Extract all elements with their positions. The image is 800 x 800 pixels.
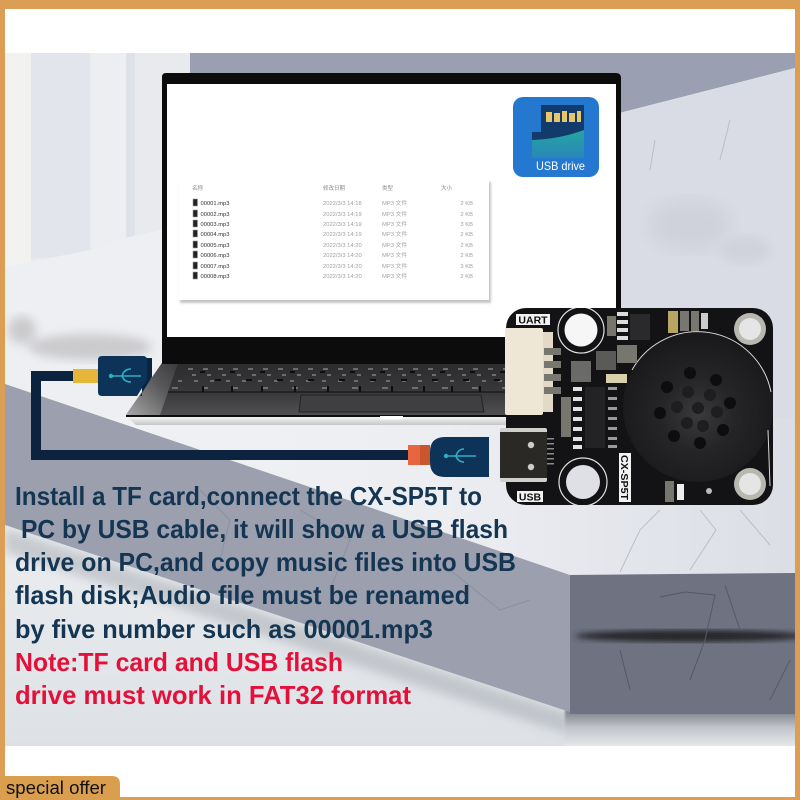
file list rows: 2022/3/3 14:19 [323, 222, 362, 228]
file list rows: 00005.mp3 [200, 243, 230, 249]
file list rows: 2022/3/3 14:20 [323, 243, 362, 249]
file list rows: 3 KB [460, 264, 473, 270]
label: UART: UART [518, 314, 548, 326]
small components [561, 311, 712, 502]
board body [506, 308, 773, 505]
file list rows: 2022/3/3 14:20 [323, 253, 362, 259]
file list rows: 2022/3/3 14:18 [323, 201, 362, 207]
label: CX-SP5T: CX-SP5T [618, 455, 630, 501]
USB-C socket [500, 428, 554, 482]
lower marble surface [5, 418, 795, 578]
file list rows: 2022/3/3 14:19 [323, 212, 362, 218]
special offer tag: special offer [6, 778, 106, 798]
special offer tag [0, 776, 120, 800]
file list rows: 00006.mp3 [200, 253, 230, 259]
instruction text: Install a TF card,connect the CX-SP5T to [15, 481, 482, 511]
file list rows: MP3 文件 [382, 199, 407, 207]
laptop base left highlight [126, 363, 178, 415]
file list rows: 2 KB [460, 232, 473, 238]
red note text: Note:TF card and USB flash [15, 647, 343, 677]
file list rows: 2 KB [460, 212, 473, 218]
instruction text: drive on PC,and copy music files into USB [15, 547, 516, 577]
file list window [179, 179, 491, 303]
file list rows: MP3 文件 [382, 210, 407, 218]
file list rows: MP3 文件 [382, 220, 407, 228]
white page band below the photo [5, 746, 795, 798]
shadow beneath block right face [565, 710, 800, 746]
file list rows: 00002.mp3 [200, 212, 230, 218]
file list rows: 2022/3/3 14:20 [323, 274, 362, 280]
touchpad [299, 395, 484, 412]
file list rows: 00004.mp3 [200, 232, 230, 238]
file list rows: MP3 文件 [382, 262, 407, 270]
USB cable [36, 356, 489, 477]
grey wall [190, 53, 795, 118]
file list header: 大小 [441, 184, 453, 192]
cable line [36, 376, 408, 455]
laptop front lip [126, 416, 512, 425]
red note text: drive must work in FAT32 format [15, 680, 411, 710]
file icons [193, 199, 198, 279]
keyboard [168, 369, 508, 392]
file list rows [200, 199, 473, 280]
laptop base [126, 363, 512, 415]
USB plug yellow [73, 356, 152, 396]
file list rows: 00003.mp3 [200, 222, 230, 228]
right marble wall [612, 68, 795, 580]
IC chip [573, 387, 617, 449]
file list rows: 3 KB [460, 222, 473, 228]
left marble surface [5, 229, 165, 430]
file list header: 类型 [382, 184, 394, 192]
mounting holes [558, 307, 766, 506]
file list rows: 2 KB [460, 201, 473, 207]
file list header: 修改日期 [323, 184, 346, 192]
CX-SP5T module board [500, 307, 773, 506]
instruction text: by five number such as 00001.mp3 [15, 614, 433, 644]
label: USB: USB [519, 492, 542, 504]
instruction text: flash disk;Audio file must be renamed [15, 580, 470, 610]
marble block: right face [570, 573, 800, 714]
curtain [5, 53, 195, 373]
file list rows: 2 KB [460, 243, 473, 249]
instruction text [15, 481, 516, 644]
instruction text: PC by USB cable, it will show a USB flash [21, 514, 508, 544]
red note text [15, 647, 411, 710]
marble block: left face [5, 384, 570, 712]
file list rows: 2022/3/3 14:20 [323, 264, 362, 270]
file list rows: 00008.mp3 [200, 274, 230, 280]
file list rows: MP3 文件 [382, 251, 407, 259]
USB plug orange [408, 437, 489, 477]
file list rows: 2 KB [460, 253, 473, 259]
file list header [192, 184, 453, 192]
file list rows: 00001.mp3 [200, 201, 230, 207]
UART connector [505, 328, 561, 415]
file list rows: 2022/3/3 14:19 [323, 232, 362, 238]
shadow beneath block left face [5, 528, 570, 735]
file list rows: 2 KB [460, 274, 473, 280]
screen bezel [162, 73, 621, 364]
screen display [167, 84, 616, 337]
file list rows: MP3 文件 [382, 230, 407, 238]
laptop [126, 73, 621, 425]
speaker [623, 332, 773, 486]
file list rows: MP3 文件 [382, 241, 407, 249]
floor below the marble block [5, 520, 795, 746]
photo background: curtain, wall and marble [5, 53, 795, 580]
file list rows: 00007.mp3 [200, 264, 230, 270]
USB drive icon [513, 97, 599, 177]
file list rows: MP3 文件 [382, 272, 407, 280]
USB drive icon: USB drive [536, 159, 585, 173]
file list header: 名称 [192, 184, 204, 192]
